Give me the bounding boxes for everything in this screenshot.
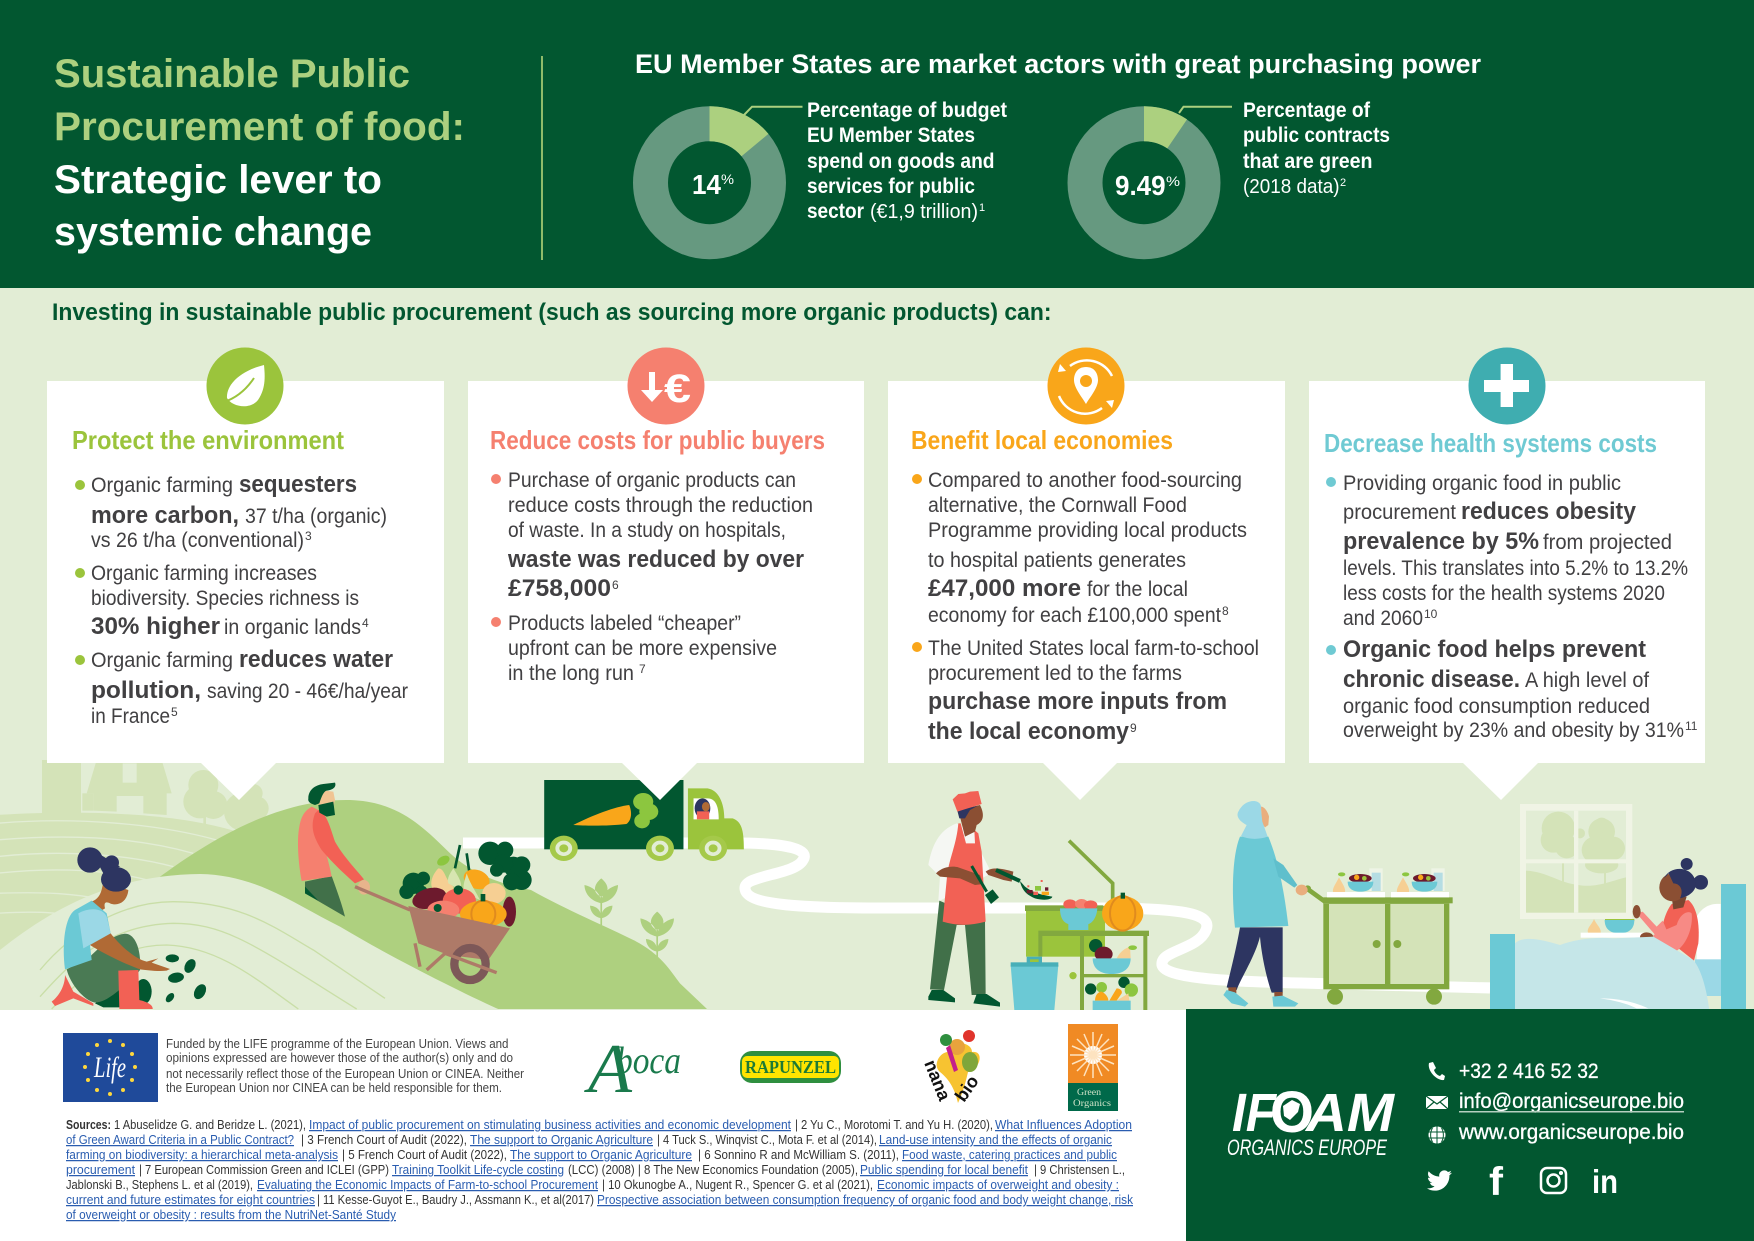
icon: medical plus (1468, 348, 1546, 424)
nurse (1223, 801, 1308, 1007)
sources: | 3 French Court of Audit (2022), (301, 1133, 467, 1147)
panel: decrease health systems costs (1309, 348, 1705, 800)
icon: falling euro (628, 348, 704, 424)
icon: location pin with arrows (1048, 348, 1124, 424)
illustration: patient in hospital bed (1480, 804, 1746, 1010)
green contracts description (1243, 99, 1390, 198)
wheelbarrow with vegetables (355, 842, 532, 980)
text: environment bullets: more carbon, (91, 502, 239, 529)
sources: of Green Award Criteria in a Public Contract? (66, 1133, 294, 1147)
text: local economy bullets: the local economy (928, 718, 1130, 745)
text: local economy bullets (912, 469, 1259, 745)
text: health bullets: levels. This translates into 5.2% to 13.2% (1343, 557, 1688, 580)
logo: Green Organics: Organics (1073, 1099, 1111, 1109)
gardener woman (52, 847, 170, 1009)
truck (544, 780, 744, 861)
logo: Aboca: boca (616, 1040, 681, 1082)
sources: Jablonski B., Stephens L. et al (2019), (66, 1178, 253, 1192)
donut chart: 9.49 percent green contracts (1085, 106, 1232, 242)
donut chart: 9.49 percent green contracts: 9.49 (1115, 170, 1166, 201)
footer: white panel (0, 1010, 1186, 1241)
text: cost bullets: upfront can be more expensive (508, 637, 777, 660)
chef (928, 791, 1052, 1007)
text: cost bullets: in the long run (508, 662, 634, 685)
logo: Aboca (584, 1031, 681, 1108)
sources: of overweight or obesity : results from the NutriNet-Santé Study (66, 1208, 397, 1222)
man pushing wheelbarrow (298, 783, 370, 917)
heading: reduce costs: Reduce costs for public buyers (490, 425, 825, 455)
text: health bullets: reduces obesity (1461, 498, 1637, 525)
budget description: spend on goods and (807, 150, 994, 173)
text: cost bullets (491, 469, 813, 685)
icon: globe (1428, 1126, 1446, 1144)
sources: The support to Organic Agriculture (510, 1148, 692, 1162)
text: local economy bullets: Compared to another food-sourcing (928, 469, 1242, 492)
text: health bullets: from projected (1543, 531, 1672, 554)
text: health bullets: procurement (1343, 501, 1456, 524)
text: health bullets: organic food consumption reduced (1343, 695, 1650, 718)
sources: | 10 Okunogbe A., Nugent R., Spencer G. et al (2021), (602, 1178, 873, 1192)
logo: Green Organics (1068, 1024, 1118, 1111)
road (463, 843, 1490, 988)
title: Strategic lever to (54, 158, 382, 202)
budget description (807, 99, 1007, 223)
footer: contact panel (1186, 1009, 1754, 1241)
illustration: farm landscape and wheelbarrow (0, 760, 707, 1009)
green contracts description: that are green (1243, 150, 1372, 173)
text: cost bullets: 6 (612, 578, 619, 592)
text: health bullets: 10 (1424, 607, 1438, 621)
text: environment bullets: in organic lands (224, 616, 361, 639)
text: environment bullets: sequesters (239, 471, 357, 498)
logo: Rapunzel: RAPUNZEL (745, 1057, 836, 1077)
back field (0, 813, 237, 970)
bed (1490, 884, 1746, 1010)
panel: protect the environment (47, 348, 444, 800)
sources: Training Toolkit Life-cycle costing (392, 1163, 564, 1177)
text: cost bullets: £758,000 (508, 575, 611, 602)
icon: twitter (1427, 1170, 1452, 1191)
faded farm buildings and trees (42, 760, 269, 831)
text: health bullets: prevalence by 5% (1343, 528, 1539, 555)
logo: IFOAM Organics Europe: ORGANICS EUROPE (1227, 1135, 1387, 1160)
sources: | 5 French Court of Audit (2022), (342, 1148, 507, 1162)
text: environment bullets: saving 20 - 46€/ha/year (207, 680, 408, 703)
logo: Aboca: A (584, 1031, 632, 1108)
funding statement: not necessarily reflect those of the European Union or CINEA. Neither (166, 1067, 524, 1081)
sources (66, 1118, 1134, 1222)
icon: email (1426, 1096, 1448, 1109)
logo: nana bio: bio (951, 1072, 983, 1105)
donut chart: 14 percent budget (650, 106, 802, 242)
icon: falling euro: € (664, 367, 691, 411)
logo: IFOAM Organics Europe: O (1270, 1080, 1314, 1145)
green contracts description: 2 (1340, 177, 1346, 189)
text: phone number: +32 2 416 52 32 (1459, 1060, 1599, 1083)
sources: Prospective association between consumption frequency of organic food and body weight change, risk (597, 1193, 1134, 1207)
sources: 1 Abuselidze G. and Beridze L. (2021), (114, 1118, 306, 1132)
icon: instagram (1541, 1168, 1566, 1193)
logo: IFOAM Organics Europe (1227, 1080, 1395, 1160)
text: local economy bullets: to hospital patients generates (928, 549, 1186, 572)
sources: Economic impacts of overweight and obesity : (877, 1178, 1119, 1192)
budget description: services for public (807, 175, 975, 198)
sources: What Influences Adoption (995, 1118, 1132, 1132)
illustration: chef at kitchen cart (928, 791, 1149, 1010)
sources: | 6 Sonnino R and McWilliam S. (2011), (698, 1148, 899, 1162)
green contracts description: (2018 data) (1243, 176, 1340, 198)
text: local economy bullets: for the local (1087, 578, 1188, 601)
text: local economy bullets: £47,000 more (928, 575, 1081, 602)
text: website: www.organicseurope.bio (1458, 1121, 1684, 1144)
donut chart: 14 percent budget: 14 (692, 169, 721, 200)
text: health bullets: Providing organic food in public (1343, 472, 1621, 495)
middle section background (0, 288, 1754, 1010)
text: local economy bullets: 8 (1222, 604, 1229, 618)
text: health bullets: 11 (1685, 719, 1698, 733)
text: environment bullets: reduces water (239, 646, 393, 673)
logo: Green Organics: Green (1077, 1088, 1101, 1098)
green hill (153, 800, 707, 1009)
icon: leaf (206, 348, 284, 424)
sources: farming on biodiversity: a hierarchical meta-analysis (66, 1148, 338, 1162)
text: cost bullets: reduce costs through the reduction (508, 494, 813, 517)
plants (584, 878, 674, 958)
icon: phone (1429, 1062, 1445, 1080)
title: Sustainable Public (54, 52, 410, 96)
text: environment bullets: vs 26 t/ha (conventional) (91, 529, 304, 552)
EU LIFE logo (63, 1033, 158, 1102)
logo: IFOAM Organics Europe: AM (1304, 1083, 1395, 1143)
funding statement (166, 1037, 524, 1095)
sources: Land-use intensity and the effects of organic (879, 1133, 1112, 1147)
logo: nana bio (920, 1030, 983, 1105)
meal tray items (1333, 868, 1445, 892)
text: health bullets: chronic disease. (1343, 666, 1520, 693)
bedside tray (1581, 919, 1643, 938)
text: local economy bullets: The United States local farm-to-school (928, 637, 1259, 660)
budget description: sector (807, 200, 864, 223)
text: local economy bullets: purchase more inputs from (928, 688, 1227, 715)
text: environment bullets: Organic farming (91, 474, 233, 497)
title: systemic change (54, 210, 372, 254)
sources: | 7 European Commission Green and ICLEI (GPP) (139, 1163, 389, 1177)
text: environment bullets: 37 t/ha (organic) (245, 505, 387, 528)
sources: procurement (66, 1163, 136, 1177)
text: health bullets: overweight by 23% and obesity by 31% (1343, 719, 1684, 742)
front hill (0, 874, 498, 1009)
section heading: Investing in sustainable public procurement (such as sourcing more organic products) can: (52, 299, 1052, 326)
text: health bullets: Organic food helps prevent (1343, 636, 1646, 663)
text: environment bullets: in France (91, 705, 170, 728)
text: local economy bullets: economy for each £100,000 spent (928, 604, 1221, 627)
text: environment bullets (75, 471, 408, 728)
panel: reduce costs for public buyers (468, 348, 864, 800)
sources: (LCC) (2008) | 8 The New Economics Foundation (2005), (568, 1163, 858, 1177)
trolley (1304, 885, 1453, 1005)
budget description: EU Member States (807, 124, 975, 147)
sources: | 11 Kesse-Guyot E., Baudry J., Assmann K., et al(2017) (317, 1193, 594, 1207)
green contracts description: public contracts (1243, 124, 1390, 147)
text: local economy bullets: Programme providing local products (928, 519, 1247, 542)
sources: | 2 Yu C., Morotomi T. and Yu H. (2020), (795, 1118, 993, 1132)
funding statement: Funded by the LIFE programme of the European Union. Views and (166, 1037, 509, 1051)
waste bin (1011, 957, 1058, 1010)
leaves (164, 954, 209, 1004)
sources: Impact of public procurement on stimulating business activities and economic development (309, 1118, 792, 1132)
heading: protect the environment: Protect the environment (72, 425, 344, 455)
market actors heading: EU Member States are market actors with great purchasing power (635, 49, 1481, 79)
text: environment bullets: biodiversity. Species richness is (91, 587, 359, 610)
text: email: info@organicseurope.bio (1459, 1090, 1684, 1113)
window (1520, 804, 1632, 919)
text: environment bullets: pollution, (91, 677, 201, 704)
text: cost bullets: of waste. In a study on hospitals, (508, 519, 786, 542)
text: cost bullets: 7 (639, 662, 646, 676)
text: cost bullets: waste was reduced by over (507, 546, 804, 573)
sources: Public spending for local benefit (860, 1163, 1028, 1177)
funding statement: the European Union nor CINEA can be held responsible for them. (166, 1081, 502, 1095)
text: cost bullets: Purchase of organic products can (508, 469, 796, 492)
title (54, 52, 465, 254)
EU LIFE logo: Life (93, 1051, 126, 1084)
donut chart: 14 percent budget: % (721, 171, 734, 187)
illustration: delivery truck and plants (544, 780, 744, 958)
funding statement: opinions expressed are however those of the author(s) only and do (166, 1051, 513, 1065)
text: health bullets (1326, 472, 1698, 742)
icon: linkedin: in (1592, 1163, 1618, 1200)
text: health bullets: and 2060 (1343, 607, 1423, 630)
sources: current and future estimates for eight countries (66, 1193, 315, 1207)
text: environment bullets: Organic farming increases (91, 562, 317, 585)
sources: | 9 Christensen L., (1034, 1163, 1125, 1177)
donut chart: 9.49 percent green contracts: % (1166, 173, 1180, 189)
sources: Food waste, catering practices and public (902, 1148, 1117, 1162)
text: environment bullets: 5 (171, 705, 178, 719)
blanket (1515, 937, 1709, 1010)
heading: benefit local economies: Benefit local economies (911, 425, 1173, 455)
header band (0, 0, 1754, 288)
illustration: nurse with food trolley (1223, 801, 1453, 1007)
heading: decrease health systems costs: Decrease health systems costs (1324, 428, 1657, 458)
text: cost bullets: Products labeled “cheaper” (508, 612, 741, 635)
title: Procurement of food: (54, 105, 465, 149)
sources: Evaluating the Economic Impacts of Farm-to-school Procurement (257, 1178, 598, 1192)
logo: IFOAM Organics Europe: IF (1232, 1083, 1278, 1143)
text: local economy bullets: procurement led to the farms (928, 662, 1182, 685)
text: health bullets: less costs for the health systems 2020 (1343, 582, 1665, 605)
panel: benefit local economies (888, 348, 1285, 800)
green contracts description: Percentage of (1243, 99, 1371, 122)
logo: Rapunzel (740, 1051, 841, 1083)
sources: | 4 Tuck S., Winqvist C., Mota F. et al (2014), (657, 1133, 877, 1147)
budget description: 1 (979, 202, 985, 214)
text: local economy bullets: alternative, the Cornwall Food (928, 494, 1187, 517)
text: environment bullets: 3 (305, 529, 312, 543)
text: health bullets: A high level of (1525, 669, 1649, 692)
budget description: Percentage of budget (807, 99, 1007, 122)
sources: Sources: (66, 1118, 111, 1132)
budget description: (€1,9 trillion) (870, 201, 978, 223)
kitchen cart (1025, 841, 1149, 1010)
text: local economy bullets: 9 (1130, 721, 1137, 735)
logo: nana bio: nana (920, 1057, 955, 1104)
icon: facebook: f (1489, 1160, 1504, 1204)
text: environment bullets: Organic farming (91, 649, 233, 672)
text: environment bullets: 4 (362, 616, 369, 630)
patient (1633, 858, 1708, 961)
text: environment bullets: 30% higher (91, 613, 220, 640)
sources: The support to Organic Agriculture (470, 1133, 653, 1147)
